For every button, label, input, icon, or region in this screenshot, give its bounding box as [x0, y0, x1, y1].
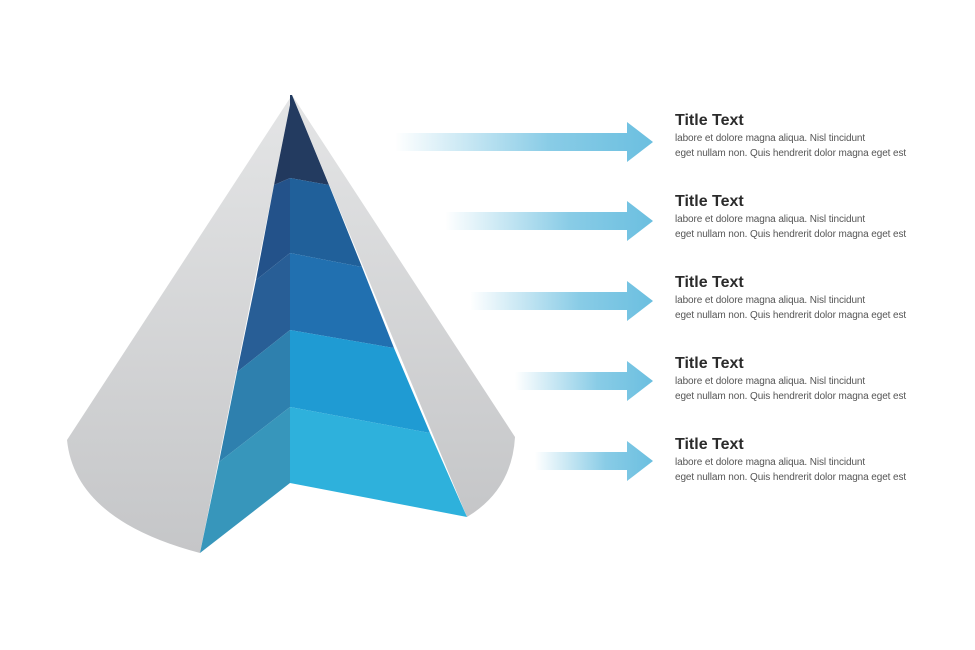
- text block 2: labore et dolore magna aliqua. Nisl tincidunt: [675, 214, 865, 225]
- text block 4: labore et dolore magna aliqua. Nisl tincidunt: [675, 376, 865, 387]
- text block 5: eget nullam non. Quis hendrerit dolor magna eget est: [675, 472, 906, 483]
- text block 3: eget nullam non. Quis hendrerit dolor magna eget est: [675, 310, 906, 321]
- text block 2: eget nullam non. Quis hendrerit dolor magna eget est: [675, 229, 906, 240]
- text block 3: labore et dolore magna aliqua. Nisl tincidunt: [675, 295, 865, 306]
- arrows: [395, 122, 653, 481]
- text block 5: labore et dolore magna aliqua. Nisl tincidunt: [675, 457, 865, 468]
- text block 1: Title Text: [675, 112, 744, 129]
- text block 1: labore et dolore magna aliqua. Nisl tincidunt: [675, 133, 865, 144]
- cutaway left face bands: [200, 95, 292, 553]
- text block 3: [675, 274, 906, 321]
- text block 3: Title Text: [675, 274, 744, 291]
- cone gray body: [67, 95, 515, 553]
- text block 4: Title Text: [675, 355, 744, 372]
- text block 2: Title Text: [675, 193, 744, 210]
- text block 4: eget nullam non. Quis hendrerit dolor magna eget est: [675, 391, 906, 402]
- text block 1: eget nullam non. Quis hendrerit dolor magna eget est: [675, 148, 906, 159]
- text block 5: [675, 436, 906, 483]
- cutaway right face bands: [290, 95, 467, 517]
- text block 2: [675, 193, 906, 240]
- text block 1: [675, 112, 906, 159]
- text block 4: [675, 355, 906, 402]
- text block 5: Title Text: [675, 436, 744, 453]
